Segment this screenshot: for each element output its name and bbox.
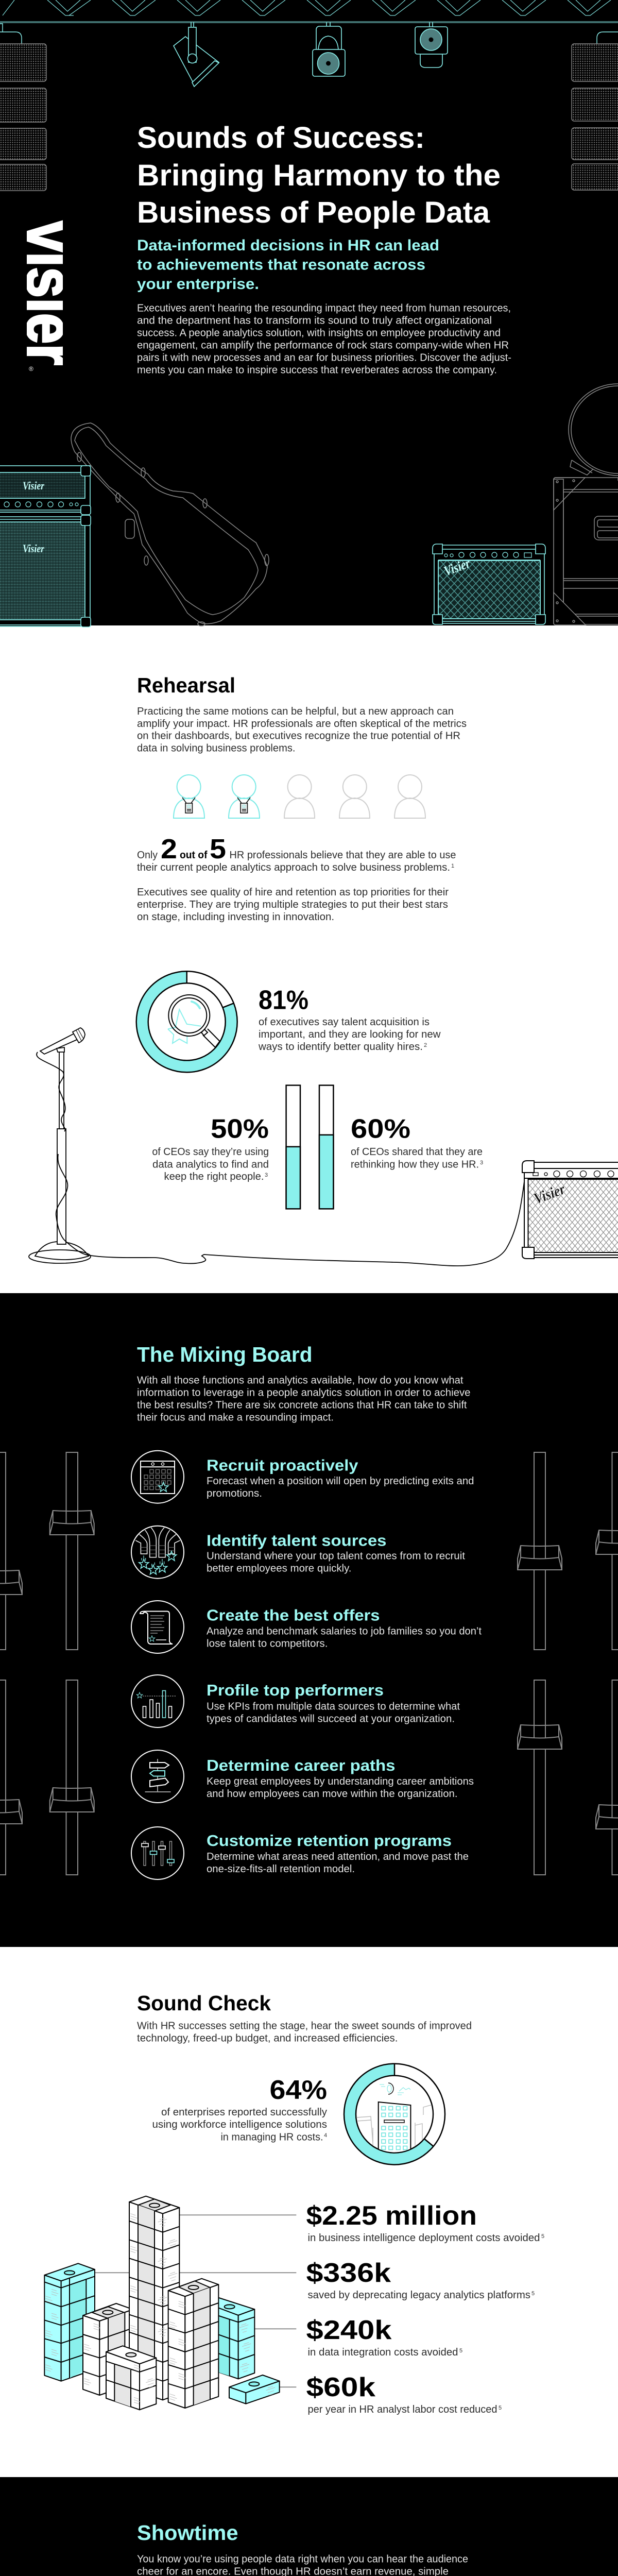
stat: 64 percent: using workforce intelligence solutions <box>152 2119 327 2130</box>
stat: 81 percent: of executives say talent acquisition is <box>259 1016 430 1028</box>
stat: 240k: $240k <box>306 2315 392 2345</box>
stat: 60 percent: rethinking how they use HR. <box>351 1159 479 1171</box>
logo: Visier vertical: ® <box>29 365 33 372</box>
panel: mixing board <box>0 1293 618 1947</box>
item: determine career paths: Keep great employees by understanding career ambitions <box>207 1776 474 1787</box>
stat: 60 percent: 3 <box>480 1160 483 1166</box>
item: create the best offers: Create the best offers <box>207 1606 380 1624</box>
stat: 81 percent: ways to identify better quality hires. <box>258 1041 423 1053</box>
item: create the best offers <box>131 1601 482 1653</box>
subtitle: your enterprise. <box>137 276 259 293</box>
building: right teal <box>215 2296 254 2379</box>
subtitle <box>137 237 439 293</box>
stat: 2.25 million: in business intelligence deployment costs avoided <box>308 2232 540 2244</box>
stat: 2 out of 5: HR professionals believe that they are able to use <box>230 850 456 861</box>
icon: sliders <box>131 1827 184 1879</box>
title: Sounds of Success: <box>137 121 425 155</box>
subtitle: Data-informed decisions in HR can lead <box>137 237 439 254</box>
stat: 240k <box>306 2315 462 2358</box>
intro text: pairs it with new processes and an ear for business priorities. Discover the adjust- <box>137 352 511 364</box>
showtime intro text: You know you’re using people data right when you can hear the audience <box>137 2553 468 2565</box>
intro text: ments you can make to inspire success that reverberates across the company. <box>137 365 497 376</box>
stat: 64 percent <box>152 2075 327 2143</box>
priorities text: on stage, including investing in innovation. <box>137 911 334 923</box>
item: customize retention programs: Customize retention programs <box>207 1832 452 1850</box>
item: determine career paths: Determine career paths <box>207 1756 396 1774</box>
stat: 2 out of 5: 2 <box>161 834 177 865</box>
stat: 50 percent: 50% <box>211 1114 269 1144</box>
stat: 81 percent: important, and they are looking for new <box>259 1029 441 1040</box>
item: customize retention programs <box>131 1827 469 1879</box>
chart: bar 60 percent <box>319 1085 333 1209</box>
rehearsal intro text: amplify your impact. HR professionals are often skeptical of the metrics <box>137 718 467 730</box>
item: determine career paths <box>131 1750 474 1803</box>
stat: 64 percent: of enterprises reported successfully <box>161 2107 327 2118</box>
item: identify talent sources: Identify talent sources <box>207 1531 386 1550</box>
panel: showtime <box>0 2477 618 2576</box>
item: recruit proactively <box>131 1451 474 1503</box>
item: create the best offers: lose talent to competitors. <box>207 1638 328 1650</box>
building: right white <box>168 2279 218 2408</box>
subtitle: to achievements that resonate across <box>137 257 425 273</box>
left amp stack <box>0 466 91 627</box>
stage truss <box>0 0 618 23</box>
stat: 64 percent: 4 <box>324 2132 327 2139</box>
stat: 2.25 million: $2.25 million <box>306 2201 477 2231</box>
stat: 50 percent: keep the right people. <box>164 1171 264 1182</box>
stat: 64 percent: in managing HR costs. <box>220 2132 323 2143</box>
chart: bar 50 percent <box>286 1085 300 1209</box>
icon: people 2 of 5 <box>174 775 425 818</box>
combo amp <box>433 544 545 624</box>
stat: 240k: in data integration costs avoided <box>308 2347 458 2358</box>
stat: 2 out of 5 <box>137 834 456 873</box>
building: tall tower <box>129 2196 179 2400</box>
priorities text: Executives see quality of hire and retention as top priorities for their <box>137 887 449 898</box>
chart: donut 81 percent <box>129 964 245 1080</box>
left speaker array <box>0 24 46 191</box>
amp on stage <box>522 1161 618 1259</box>
item: identify talent sources <box>131 1526 465 1579</box>
item: identify talent sources: Understand where your top talent comes from to recruit <box>207 1551 465 1562</box>
stat: 60k: $60k <box>306 2372 375 2402</box>
stat: 336k: $336k <box>306 2258 391 2288</box>
rehearsal intro text: data in solving business problems. <box>137 743 296 754</box>
rehearsal intro text: on their dashboards, but executives recognize the true potential of HR <box>137 731 460 742</box>
title: Bringing Harmony to the <box>137 159 501 192</box>
rehearsal intro text <box>137 706 467 754</box>
logo: Visier vertical <box>27 220 63 371</box>
logo: Visier vertical: visier <box>13 221 87 365</box>
stat: 81 percent <box>258 985 441 1053</box>
item: recruit proactively: promotions. <box>207 1488 262 1499</box>
combo amp: Visier <box>442 555 472 579</box>
item: recruit proactively: Recruit proactively <box>207 1456 358 1475</box>
item: determine career paths: and how employees can move within the organization. <box>207 1788 457 1800</box>
item: profile top performers <box>131 1675 460 1727</box>
stage light: down <box>415 22 448 67</box>
heading: The Mixing Board: The Mixing Board <box>137 1343 312 1366</box>
fader rails left <box>0 1452 94 1875</box>
priorities text: enterprise. They are trying multiple strategies to put their best stars <box>137 899 448 910</box>
mixing board intro text: the best results? There are six concrete actions that HR can take to shift <box>137 1399 467 1411</box>
stat: 336k: 5 <box>531 2291 535 2297</box>
intro text: Executives aren’t hearing the resounding impact they need from human resources, <box>137 303 511 314</box>
item: profile top performers: Profile top performers <box>207 1681 384 1699</box>
heading: Sound Check: Sound Check <box>137 1991 271 2015</box>
sound check intro text: technology, freed-up budget, and increased efficiencies. <box>137 2033 398 2044</box>
intro text <box>137 303 511 376</box>
item: customize retention programs: Determine what areas need attention, and move past the <box>207 1851 469 1862</box>
callout lines <box>95 2215 296 2387</box>
fader rails right <box>518 1452 618 1875</box>
stage light: front <box>313 22 345 76</box>
stat: 64 percent: 64% <box>270 2075 327 2105</box>
stat: 240k: 5 <box>459 2348 462 2354</box>
stat: 60k: per year in HR analyst labor cost reduced <box>308 2404 497 2415</box>
building: small brick <box>229 2375 280 2404</box>
item: customize retention programs: one-size-fits-all retention model. <box>207 1863 355 1875</box>
microphone cable <box>37 1052 534 1266</box>
bass drum and cabinet <box>554 384 618 625</box>
guitar case <box>71 423 269 626</box>
stat: 60k: 5 <box>499 2405 502 2411</box>
intro text: and the department has to transform its sound to truly affect organizational <box>137 315 492 327</box>
title <box>137 121 501 229</box>
amp on stage: Visier <box>531 1180 568 1208</box>
stat: 2.25 million: 5 <box>541 2233 544 2240</box>
building: front block <box>106 2346 156 2410</box>
icon: calendar <box>131 1451 184 1503</box>
showtime intro text <box>137 2553 468 2576</box>
stat: 2 out of 5: Only <box>137 850 158 861</box>
mixing board intro text: information to leverage in a people analytics solution in order to achieve <box>137 1387 471 1398</box>
sound check intro text <box>137 2021 472 2044</box>
rehearsal intro text: Practicing the same motions can be helpful, but a new approach can <box>137 706 454 717</box>
stat: 81 percent: 81% <box>259 985 308 1015</box>
stat: 50 percent: 3 <box>265 1172 268 1178</box>
left amp stack: Visier <box>23 479 44 492</box>
mixing board intro text: With all those functions and analytics available, how do you know what <box>137 1375 464 1386</box>
stat: 2.25 million <box>306 2201 544 2244</box>
icon: bar chart <box>131 1675 184 1727</box>
item: create the best offers: Analyze and benchmark salaries to job families so you don’t <box>207 1626 482 1637</box>
item: profile top performers: types of candidates will succeed at your organization. <box>207 1714 455 1725</box>
item: profile top performers: Use KPIs from multiple data sources to determine what <box>207 1701 460 1713</box>
stat: 50 percent: of CEOs say they’re using <box>152 1146 269 1158</box>
stat: 2 out of 5: out of <box>180 850 208 861</box>
left amp stack: Visier <box>23 542 44 555</box>
stat: 60 percent <box>351 1114 483 1171</box>
panel: sound check <box>44 1991 544 2415</box>
intro text: success. A people analytics solution, with insights on employee productivity and <box>137 328 501 339</box>
panel: rehearsal <box>29 673 618 1266</box>
title: Business of People Data <box>137 196 490 229</box>
stat: 60 percent: 60% <box>351 1114 410 1144</box>
item: identify talent sources: better employees more quickly. <box>207 1563 351 1574</box>
stat: 2 out of 5: 1 <box>451 863 454 869</box>
building: middle back <box>83 2303 133 2395</box>
illustration: isometric city <box>44 2196 296 2410</box>
priorities text <box>137 887 449 923</box>
stat: 50 percent: data analytics to find and <box>152 1159 269 1171</box>
icon: signpost <box>131 1750 184 1803</box>
intro text: engagement, can amplify the performance of rock stars company-wide when HR <box>137 340 509 351</box>
microphone on stand <box>29 1028 91 1263</box>
item: recruit proactively: Forecast when a position will open by predicting exits and <box>207 1476 474 1487</box>
stat: 60 percent: of CEOs shared that they are <box>351 1146 483 1158</box>
chart: donut 64 percent <box>343 2063 446 2165</box>
right speaker array <box>572 32 618 190</box>
stat: 2 out of 5: their current people analytics approach to solve business problems. <box>137 862 450 873</box>
stat: 336k <box>306 2258 535 2301</box>
stat: 50 percent <box>152 1114 269 1182</box>
stat: 81 percent: 2 <box>424 1042 427 1048</box>
heading: Rehearsal: Rehearsal <box>137 673 235 697</box>
icon: offer scroll <box>131 1601 184 1653</box>
stage light: angled <box>174 22 219 87</box>
icon: talent funnels <box>131 1526 184 1579</box>
stat: 60k <box>306 2372 502 2415</box>
mixing board intro text: their focus and make a resounding impact. <box>137 1412 334 1423</box>
mixing board intro text <box>137 1375 471 1423</box>
panel: hero <box>0 0 618 627</box>
sound check intro text: With HR successes setting the stage, hear the sweet sounds of improved <box>137 2021 472 2032</box>
stat: 336k: saved by deprecating legacy analytics platforms <box>308 2290 530 2301</box>
stat: 2 out of 5: 5 <box>210 834 226 865</box>
heading: Showtime: Showtime <box>137 2521 238 2545</box>
building: left teal <box>44 2263 95 2381</box>
